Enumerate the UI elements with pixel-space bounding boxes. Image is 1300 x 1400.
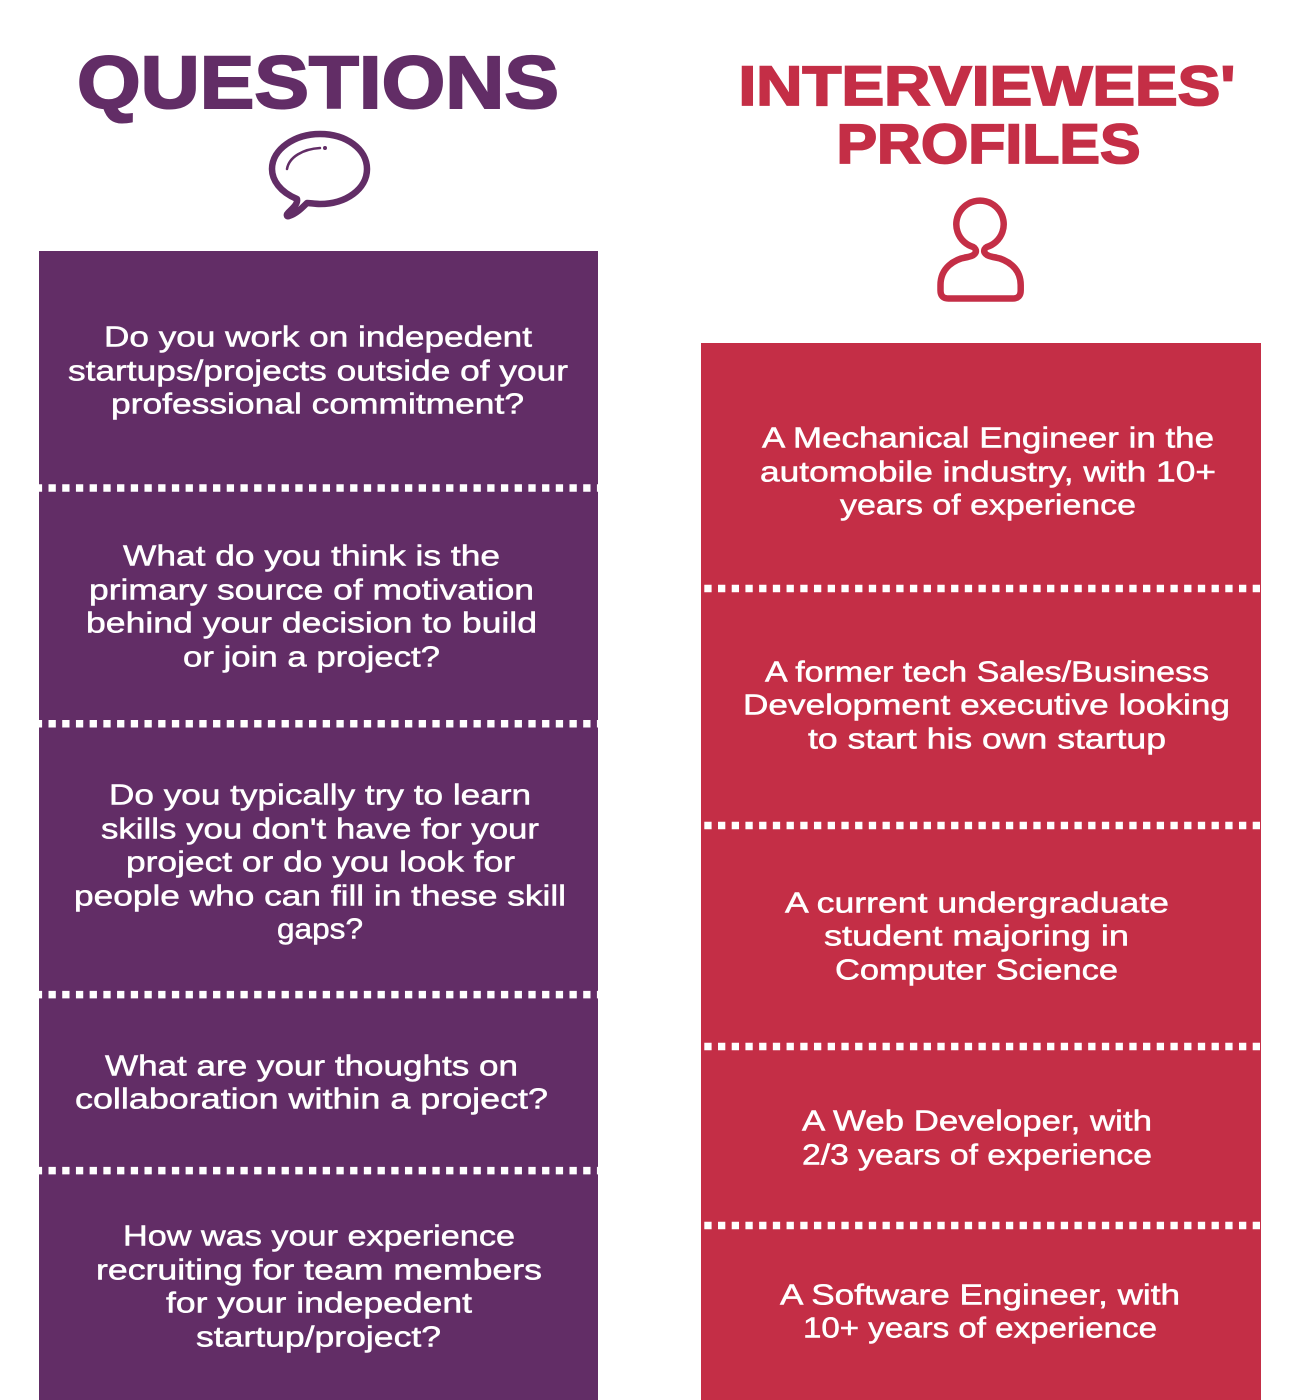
profile 3: Computer Science <box>835 954 1118 986</box>
profile 4: 2/3 years of experience <box>802 1140 1152 1172</box>
question 2: behind your decision to build <box>86 608 537 640</box>
question 5 <box>96 1220 542 1354</box>
profiles list panel <box>701 343 1261 1400</box>
question 4: collaboration within a project? <box>75 1084 548 1116</box>
question 5: for your indepedent <box>166 1288 472 1320</box>
profile 3: A current undergraduate <box>785 888 1169 920</box>
question 5: startup/project? <box>196 1322 441 1354</box>
panel: questions <box>35 41 598 1400</box>
question 3: skills you don't have for your <box>101 814 540 846</box>
profile 1 <box>760 422 1216 522</box>
question 5: How was your experience <box>123 1220 515 1252</box>
profile 2: Development executive looking <box>743 690 1230 722</box>
question 3 <box>74 780 566 946</box>
question 4 <box>75 1050 548 1116</box>
profile 4 <box>802 1106 1152 1172</box>
profile 3: student majoring in <box>824 920 1129 952</box>
profile 5: 10+ years of experience <box>803 1312 1157 1344</box>
profile 1: automobile industry, with 10+ <box>760 456 1216 488</box>
heading: questions: QUESTIONS <box>77 41 559 124</box>
question 2: What do you think is the <box>123 540 500 572</box>
panel: interviewees' profiles <box>701 54 1261 1400</box>
profile 2: A former tech Sales/Business <box>765 656 1209 688</box>
question 3: Do you typically try to learn <box>109 780 531 812</box>
profile 2 <box>743 656 1230 756</box>
question 1: Do you work on indepedent <box>104 322 532 354</box>
heading: interviewees' profiles: PROFILES <box>836 112 1140 175</box>
question 2 <box>86 540 537 674</box>
question 2: or join a project? <box>183 642 440 674</box>
question 3: people who can fill in these skill <box>74 880 566 912</box>
questions list panel <box>35 251 598 1400</box>
icon: speech bubble <box>272 134 367 216</box>
profile 2: to start his own startup <box>808 724 1166 756</box>
question 1 <box>68 322 569 420</box>
question 1: startups/projects outside of your <box>68 356 569 388</box>
question 1: professional commitment? <box>111 388 524 420</box>
heading: interviewees' profiles <box>738 54 1236 175</box>
profile 5: A Software Engineer, with <box>780 1280 1180 1312</box>
profile 5 <box>780 1280 1180 1344</box>
question 4: What are your thoughts on <box>105 1050 518 1082</box>
profile 4: A Web Developer, with <box>802 1106 1152 1138</box>
question 5: recruiting for team members <box>96 1254 542 1286</box>
profile 1: A Mechanical Engineer in the <box>762 422 1214 454</box>
heading: interviewees' profiles: INTERVIEWEES' <box>738 54 1236 117</box>
question 3: project or do you look for <box>126 846 516 878</box>
profile 1: years of experience <box>840 490 1136 522</box>
question 2: primary source of motivation <box>89 574 534 606</box>
question 3: gaps? <box>277 914 363 946</box>
icon: person <box>940 201 1021 298</box>
profile 3 <box>785 888 1169 986</box>
